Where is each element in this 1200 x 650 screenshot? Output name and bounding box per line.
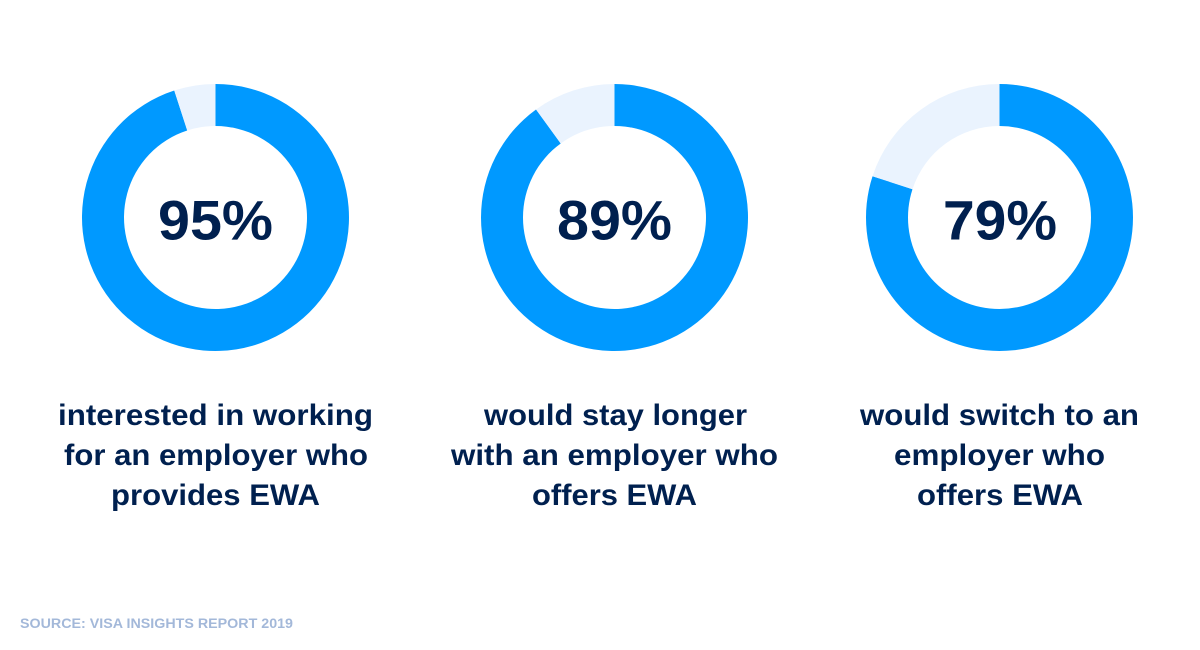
donut chart: 79% [866, 84, 1133, 351]
caption: would stay longer: offers EWA [532, 479, 697, 512]
donut chart: 95% [82, 84, 349, 351]
caption: interested in working: interested in working [58, 399, 373, 432]
caption: interested in working: for an employer who [64, 439, 368, 472]
caption: would stay longer: would stay longer [483, 399, 747, 432]
caption: would stay longer [450, 399, 778, 512]
panel: 79% statistic [859, 84, 1139, 512]
donut chart: 89% [481, 84, 748, 351]
source note: SOURCE: VISA INSIGHTS REPORT 2019 [20, 616, 293, 631]
caption: would switch to an [859, 399, 1139, 512]
caption: would stay longer: with an employer who [450, 439, 778, 472]
caption: interested in working: provides EWA [111, 479, 320, 512]
panel: 95% statistic [58, 84, 373, 512]
caption: interested in working [58, 399, 373, 512]
percentage: 89%: 89% [557, 188, 672, 252]
panel: 89% statistic [450, 84, 778, 512]
caption: would switch to an: offers EWA [917, 479, 1083, 512]
percentage: 95%: 95% [158, 188, 273, 252]
percentage: 79%: 79% [943, 188, 1057, 252]
caption: would switch to an: employer who [894, 439, 1105, 472]
caption: would switch to an: would switch to an [859, 399, 1139, 432]
